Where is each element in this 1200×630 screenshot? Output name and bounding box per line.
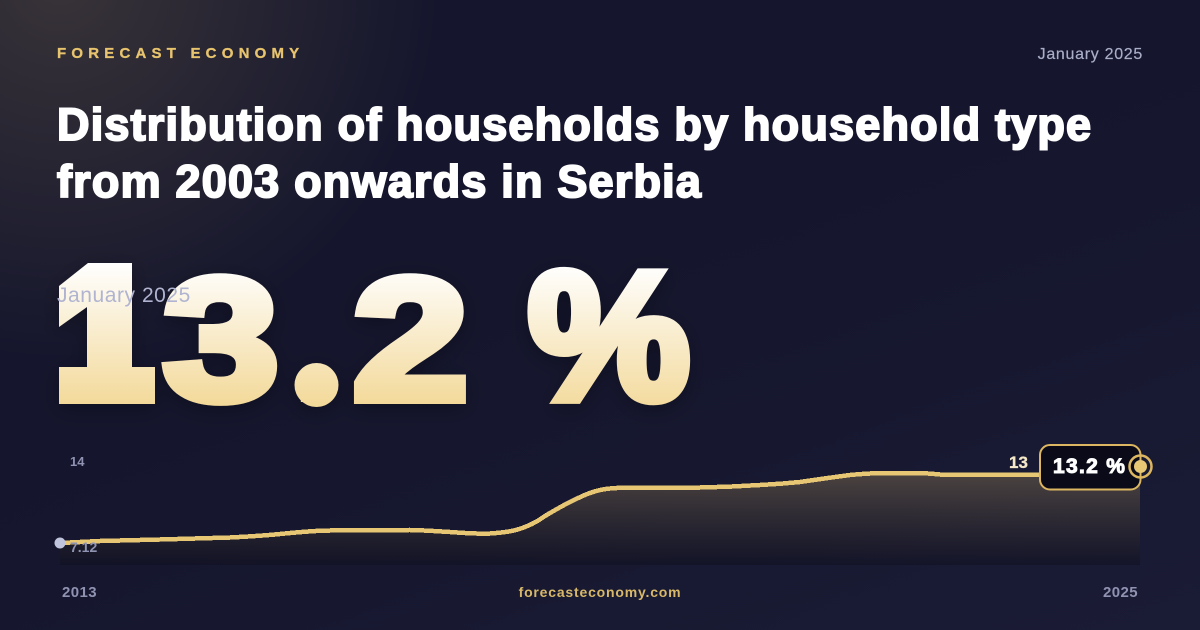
start marker bbox=[54, 538, 66, 548]
area fill bbox=[60, 473, 1140, 565]
value callout bbox=[1040, 445, 1140, 490]
axis start year: 2013 bbox=[62, 584, 97, 601]
date top right: January 2025 bbox=[1038, 46, 1143, 63]
big value: . bbox=[299, 307, 332, 419]
source url: forecasteconomy.com bbox=[519, 584, 681, 600]
big value: 1 bbox=[88, 323, 141, 412]
overlapping date label: January 2025 bbox=[57, 284, 191, 307]
y label 14: 14 bbox=[70, 454, 85, 469]
y label 7.12: 7.12 bbox=[70, 539, 97, 555]
title bbox=[56, 99, 1092, 207]
line bbox=[60, 473, 1140, 543]
last value label 13: 13 bbox=[1009, 453, 1028, 472]
axis end year: 2025 bbox=[1103, 584, 1138, 601]
title: Distribution of households by household type bbox=[57, 99, 1092, 150]
title: from 2003 onwards in Serbia bbox=[57, 156, 702, 207]
big value bbox=[59, 240, 690, 430]
end marker bbox=[1130, 456, 1152, 478]
value callout: 13.2 % bbox=[1053, 455, 1126, 478]
eyebrow: forecast economy: FORECAST ECONOMY bbox=[57, 45, 304, 62]
